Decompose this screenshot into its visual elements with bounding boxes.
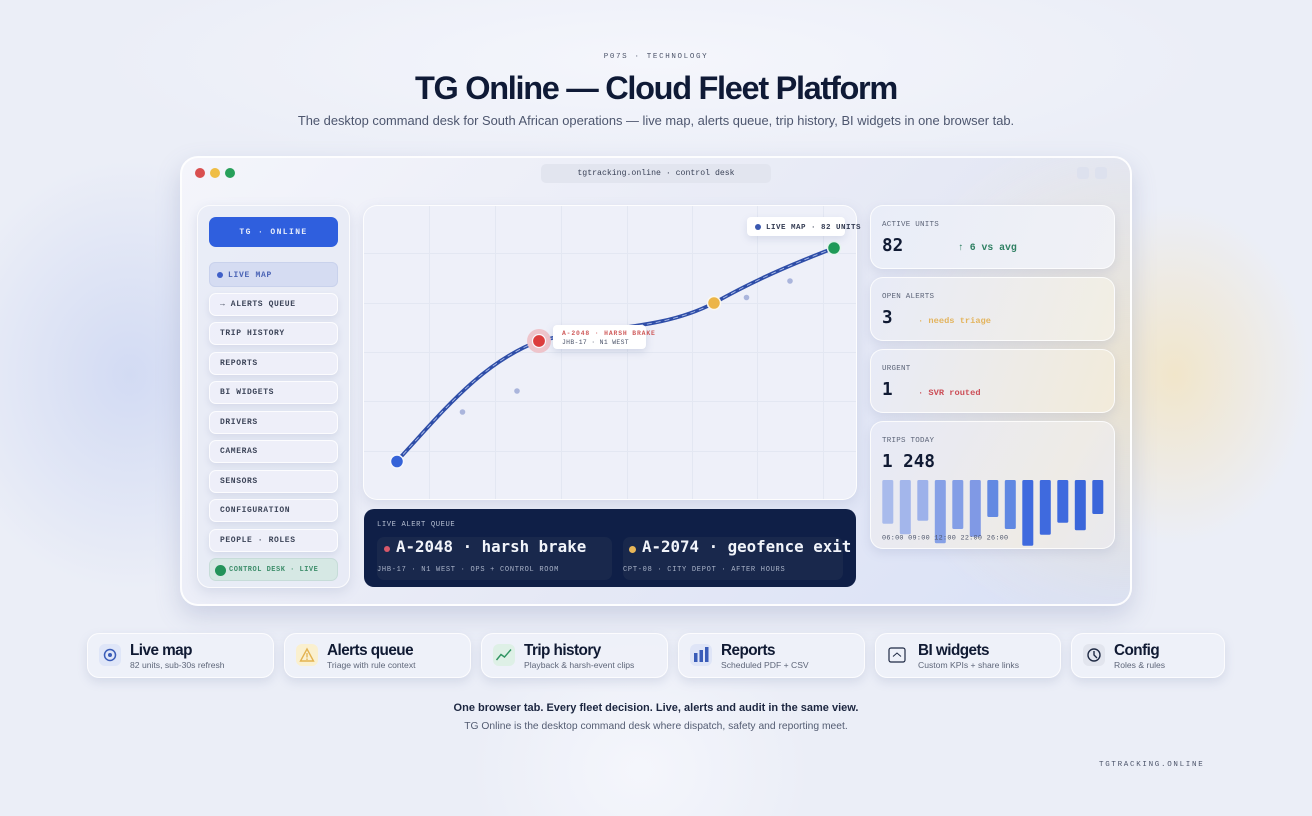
kpi: open alerts: · needs triage — [918, 316, 991, 326]
closing note: TG Online is the desktop command desk where dispatch, safety and reporting meet. — [464, 721, 848, 732]
kpi: urgent: URGENT — [882, 365, 911, 373]
nav: cameras — [209, 440, 338, 463]
alert row: A-2048 — [377, 537, 612, 580]
kpi: active units — [870, 205, 1115, 269]
nav: cameras: CAMERAS — [220, 447, 258, 456]
nav: alerts queue: → ALERTS QUEUE — [220, 300, 296, 309]
address bar: tgtracking.online · control desk — [577, 169, 735, 178]
nav: reports: REPORTS — [220, 359, 258, 368]
panel: live alert queue — [364, 509, 856, 587]
chart: route map — [364, 206, 856, 499]
nav: configuration: CONFIGURATION — [220, 506, 290, 515]
feature: BI widgets — [875, 633, 1061, 678]
feature: reports: Reports — [721, 642, 775, 659]
nav: BI widgets — [209, 381, 338, 404]
bar chart: trips today — [882, 480, 1104, 546]
nav: BI widgets: BI WIDGETS — [220, 388, 274, 397]
feature: alerts queue: Alerts queue — [327, 642, 413, 659]
marker: end — [828, 242, 840, 254]
nav: drivers — [209, 411, 338, 434]
feature: BI widgets: BI widgets — [918, 642, 989, 659]
callout: live map units — [747, 217, 845, 236]
nav: sensors — [209, 470, 338, 493]
footer url: TGTRACKING.ONLINE — [1099, 761, 1204, 769]
address bar — [541, 164, 771, 183]
feature: BI widgets: Custom KPIs + share links — [918, 660, 1019, 670]
feature: trip history — [481, 633, 668, 678]
feature: alerts queue: Triage with rule context — [327, 660, 416, 670]
kpi: open alerts: OPEN ALERTS — [882, 293, 934, 301]
kpi: trips today — [870, 421, 1115, 549]
kpi: active units: ACTIVE UNITS — [882, 221, 939, 229]
subtitle: The desktop command desk for South African operations — live map, alerts queue, trip history, BI widgets in one browser tab. — [298, 113, 1014, 128]
alert row: A-2074: CPT-08 · CITY DEPOT · AFTER HOURS — [623, 566, 785, 574]
feature: trip history: Playback & harsh-event clips — [524, 660, 634, 670]
sidebar logo: TG · ONLINE — [239, 228, 308, 237]
nav: reports — [209, 352, 338, 375]
alert row: A-2074: A-2074 · geofence exit — [642, 537, 851, 556]
kpi: open alerts: 3 — [882, 308, 893, 328]
nav: live map: LIVE MAP — [228, 271, 272, 280]
queue label: LIVE ALERT QUEUE — [377, 521, 455, 529]
fleet dots — [460, 278, 793, 415]
kpi: urgent: 1 — [882, 380, 893, 400]
feature: live map: Live map — [130, 642, 192, 659]
alert row: A-2048: A-2048 · harsh brake — [396, 537, 586, 556]
closing statement: One browser tab. Every fleet decision. Live, alerts and audit in the same view. — [454, 702, 858, 714]
feature: alerts queue — [284, 633, 471, 678]
nav: trip history: TRIP HISTORY — [220, 329, 285, 338]
marker: harsh brake — [527, 329, 551, 353]
title: TG Online — Cloud Fleet Platform — [415, 70, 897, 106]
kpi: trips today: 1 248 — [882, 452, 935, 472]
kpi: active units: ↑ 6 vs avg — [958, 242, 1017, 253]
feature: reports: Scheduled PDF + CSV — [721, 660, 809, 670]
sidebar logo — [209, 217, 338, 247]
panel: live map — [363, 205, 857, 500]
nav: alerts queue — [209, 293, 338, 316]
icon: window controls — [195, 168, 235, 178]
eyebrow: P07S · TECHNOLOGY — [604, 53, 708, 61]
feature: trip history: Trip history — [524, 642, 601, 659]
feature: live map — [87, 633, 274, 678]
kpi: active units: 82 — [882, 236, 903, 256]
callout: harsh brake: A-2048 · HARSH BRAKE — [562, 330, 656, 337]
nav: people and roles — [209, 529, 338, 552]
callout: harsh brake — [553, 325, 646, 349]
nav: live map — [209, 262, 338, 287]
window buttons — [1077, 167, 1107, 179]
status: control desk live: CONTROL DESK · LIVE — [229, 566, 318, 574]
panel: browser window — [180, 156, 1132, 606]
callout: live map units: LIVE MAP · 82 UNITS — [766, 224, 861, 232]
route line — [397, 248, 834, 461]
time axis labels: 06:00 09:00 12:00 22:00 26:00 — [882, 534, 1008, 542]
kpi: urgent: · SVR routed — [918, 388, 981, 398]
nav: sensors: SENSORS — [220, 477, 258, 486]
nav: drivers: DRIVERS — [220, 418, 258, 427]
status: control desk live — [209, 558, 338, 581]
alert row: A-2074 — [623, 537, 843, 580]
feature: config: Config — [1114, 642, 1159, 659]
nav: configuration — [209, 499, 338, 522]
kpi: open alerts — [870, 277, 1115, 341]
feature: config — [1071, 633, 1225, 678]
marker: start — [390, 455, 404, 468]
panel: sidebar — [197, 205, 350, 588]
nav: people and roles: PEOPLE · ROLES — [220, 536, 296, 545]
feature: live map: 82 units, sub-30s refresh — [130, 660, 225, 670]
nav: trip history — [209, 322, 338, 345]
feature: reports — [678, 633, 865, 678]
kpi: trips today: TRIPS TODAY — [882, 437, 934, 445]
feature: config: Roles & rules — [1114, 660, 1165, 670]
alert row: A-2048: JHB-17 · N1 WEST · OPS + CONTROL ROOM — [377, 566, 559, 574]
callout: harsh brake: JHB-17 · N1 WEST — [562, 339, 629, 346]
marker: amber — [708, 296, 720, 310]
kpi: urgent — [870, 349, 1115, 413]
